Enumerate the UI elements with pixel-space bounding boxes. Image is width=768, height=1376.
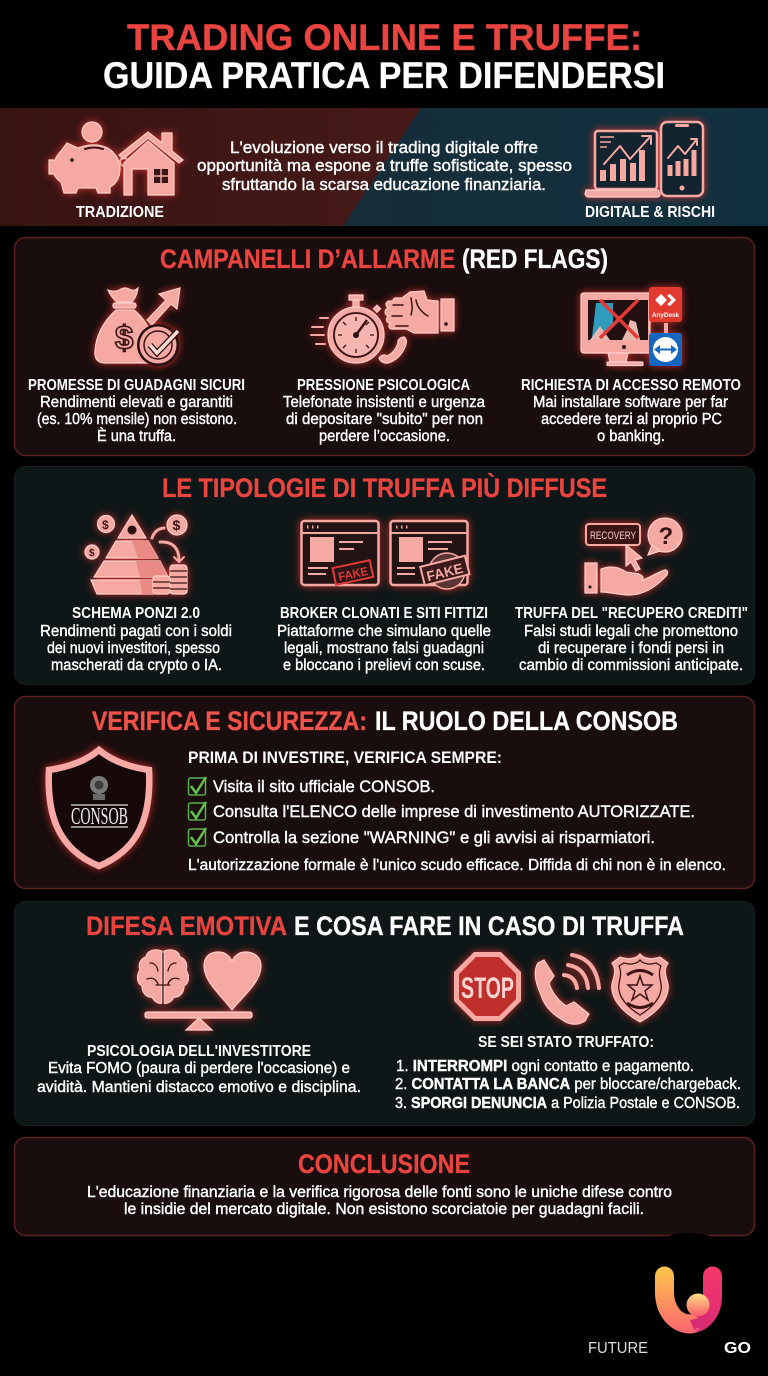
text: psicologia: avidità. Mantieni distacco emotivo e disciplina. [37, 1079, 361, 1096]
conclusion text [87, 1184, 672, 1218]
panel: conclusione [14, 1138, 754, 1236]
icon: recovery hand: RECOVERY [590, 530, 636, 542]
text: accesso remoto: RICHIESTA DI ACCESSO REMOTO [521, 377, 741, 394]
text: se sei stato truffato [395, 1034, 741, 1112]
heading: red flags: CAMPANELLI D’ALLARME [160, 244, 455, 274]
icon: stopwatch, fist and handset [311, 291, 454, 363]
icon: ponzi pyramid: $ [102, 518, 109, 532]
panel: tipologie di truffa [14, 466, 754, 684]
intro text: sfruttando la scarsa educazione finanziaria. [222, 176, 546, 194]
icon: recovery hand [585, 518, 682, 595]
heading: consob: IL RUOLO DELLA CONSOB [375, 706, 678, 736]
icon: money bag with check [95, 288, 180, 366]
text: psicologia: PSICOLOGIA DELL'INVESTITORE [87, 1043, 311, 1060]
panel: difesa emotiva [14, 902, 754, 1126]
text: recupero crediti: cambio di commissioni anticipate. [519, 657, 743, 674]
check item 3: Controlla la sezione "WARNING" e gli avvisi ai risparmiatori. [213, 829, 655, 847]
icon: consob shield: CONSOB [71, 804, 128, 830]
text: broker clonati: Piattaforme che simulano quelle [277, 623, 491, 640]
text: schema ponzi: SCHEMA PONZI 2.0 [72, 605, 200, 622]
text: accesso remoto: o banking. [597, 428, 665, 445]
text: recupero crediti [515, 605, 748, 674]
logo: future: GO [724, 1340, 751, 1357]
heading: consob: VERIFICA E SICUREZZA: [92, 706, 367, 736]
conclusion text: le insidie del mercato digitale. Non esistono scorciatoie per guadagni facili. [124, 1201, 644, 1218]
icon: brain and heart balance [138, 950, 261, 1030]
text: promesse [28, 377, 245, 445]
intro text: opportunità ma espone a truffe sofisticate, spesso [197, 157, 572, 175]
conclusion text: L'educazione finanziaria e la verifica rigorosa delle fonti sono le uniche difese contro [87, 1184, 672, 1201]
text: promesse: PROMESSE DI GUADAGNI SICURI [28, 377, 245, 394]
icon: stop sign: STOP [461, 972, 514, 1005]
icon: ponzi pyramid [85, 515, 187, 594]
icon: remote access computer: AnyDesk [652, 312, 679, 319]
icon: fake broker sites: FAKE [425, 560, 465, 584]
icon: stop sign [454, 952, 521, 1021]
intro text: L'evoluzione verso il trading digitale offre [230, 139, 538, 157]
text: pressione: perdere l’occasione. [319, 428, 450, 445]
text: se sei stato truffato: SE SEI STATO TRUFFATO: [478, 1034, 654, 1051]
title: GUIDA PRATICA PER DIFENDERSI [103, 55, 665, 96]
step 2: 2. CONTATTA LA BANCA per bloccare/chargeback. [395, 1076, 741, 1093]
intro text [197, 139, 572, 194]
panel: campanelli d'allarme [14, 238, 754, 456]
title: TRADING ONLINE E TRUFFE: [127, 17, 642, 58]
heading: difesa emotiva: E COSA FARE IN CASO DI TRUFFA [294, 911, 684, 941]
label: tradizione: TRADIZIONE [76, 204, 164, 221]
text: recupero crediti: di recuperare i fondi persi in [538, 640, 724, 657]
icon: ponzi pyramid: $ [89, 548, 95, 559]
step 1: 1. INTERROMPI ogni contatto e pagamento. [396, 1058, 694, 1075]
text: accesso remoto: accedere terzi al proprio PC [541, 411, 722, 428]
text: promesse: (es. 10% mensile) non esistono. [37, 411, 237, 428]
text: accesso remoto [521, 377, 741, 445]
heading: difesa emotiva [86, 911, 684, 941]
text: pressione: PRESSIONE PSICOLOGICA [297, 377, 470, 394]
icon: piggy bank and house [49, 122, 183, 195]
text: schema ponzi: mascherati da crypto o IA. [51, 657, 222, 674]
text: pressione: di depositare "subito" per non [286, 411, 483, 428]
icon: fake broker sites: FAKE [337, 564, 369, 584]
icon: remote access computer [581, 287, 682, 366]
checklist: PRIMA DI INVESTIRE, VERIFICA SEMPRE: [188, 749, 502, 767]
label: digitale e rischi: DIGITALE & RISCHI [585, 204, 715, 221]
text: schema ponzi: Rendimenti pagati con i soldi [40, 623, 232, 640]
icon: consob shield [49, 750, 149, 866]
text: accesso remoto: Mai installare software per far [533, 394, 728, 411]
check item 2: Consulta l'ELENCO delle imprese di investimento AUTORIZZATE. [213, 803, 695, 821]
title [103, 17, 665, 96]
icon: recovery hand: ? [658, 523, 673, 550]
text: broker clonati [277, 605, 491, 674]
icon: phone [535, 955, 599, 1024]
text: broker clonati: e bloccano i prelievi con scuse. [283, 657, 485, 674]
text: pressione: Telefonate insistenti e urgenza [283, 394, 485, 411]
heading: tipologie: LE TIPOLOGIE DI TRUFFA PIÙ DIFFUSE [162, 472, 607, 503]
text: psicologia: Evita FOMO (paura di perdere l'occasione) e [48, 1060, 350, 1077]
text: broker clonati: BROKER CLONATI E SITI FITTIZI [280, 605, 488, 622]
check item 1: Visita il sito ufficiale CONSOB. [213, 778, 435, 796]
panel: verifica e sicurezza [14, 696, 754, 888]
icon: fake broker sites [302, 521, 469, 589]
panel: intro banner [0, 108, 768, 226]
text: pressione [283, 377, 485, 445]
text: psicologia [37, 1043, 361, 1096]
icon: money bag with check: $ [115, 319, 133, 356]
text: broker clonati: legali, mostrano falsi guadagni [284, 640, 484, 657]
text: schema ponzi [40, 605, 232, 674]
text: promesse: È una truffa. [97, 428, 176, 445]
heading: consob [92, 706, 678, 736]
heading: conclusione: CONCLUSIONE [298, 1149, 470, 1179]
text: recupero crediti: Falsi studi legali che promettono [524, 623, 738, 640]
closing note: L'autorizzazione formale è l'unico scudo efficace. Diffida di chi non è in elenco. [188, 857, 726, 874]
text: promesse: Rendimenti elevati e garantiti [40, 394, 233, 411]
checklist [188, 749, 726, 874]
icon: police badge [612, 954, 668, 1022]
logo: future: FUTURE [588, 1340, 648, 1357]
logo: future [588, 1233, 751, 1357]
text: schema ponzi: dei nuovi investitori, spesso [47, 640, 220, 657]
heading: difesa emotiva: DIFESA EMOTIVA [86, 911, 287, 941]
heading: red flags: (RED FLAGS) [462, 244, 608, 274]
icon: ponzi pyramid: $ [172, 517, 180, 533]
icon: laptop and phone charts [585, 122, 703, 197]
step 3: 3. SPORGI DENUNCIA a Polizia Postale e CONSOB. [395, 1095, 740, 1112]
